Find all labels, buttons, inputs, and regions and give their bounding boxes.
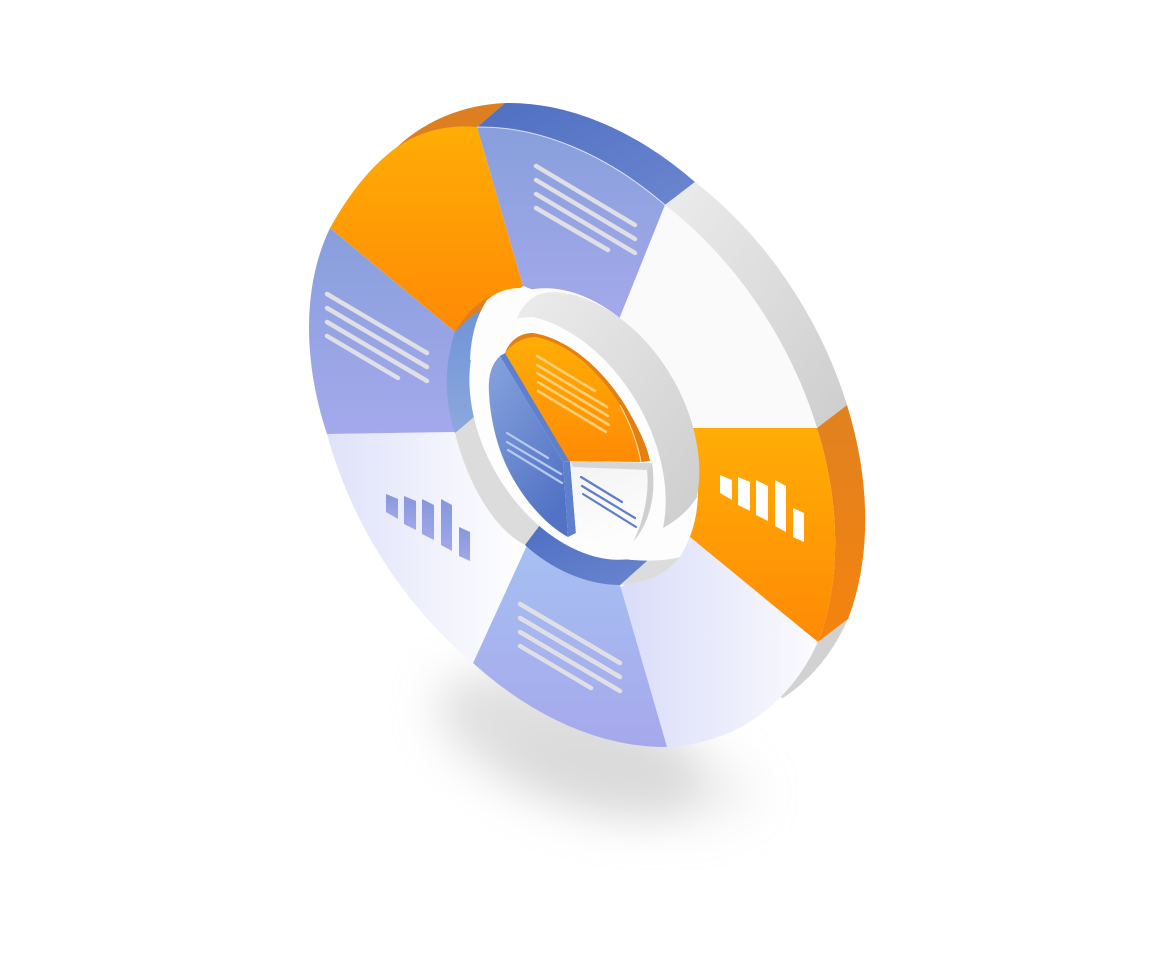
central hub — [423, 248, 741, 600]
hub slope: orange sliver — [455, 296, 495, 332]
hub slope: blue left — [447, 308, 487, 433]
text lines: blue left segment — [327, 294, 427, 381]
segment: blue left — [309, 228, 455, 434]
hub white ring — [423, 248, 741, 600]
pie wedge: blue — [489, 353, 576, 537]
segment: orange right — [688, 428, 835, 642]
disc face segments — [309, 126, 835, 747]
text lines: blue wedge — [507, 433, 562, 483]
bar icon: lavender segment — [386, 494, 470, 561]
segment: orange top — [330, 126, 523, 332]
text lines: blue top segment — [536, 166, 635, 253]
text lines: white wedge — [581, 477, 636, 527]
pie wedge: white — [570, 461, 654, 543]
text lines: orange wedge — [537, 356, 609, 432]
segment: blue bottom — [473, 545, 667, 747]
segment: blue top — [477, 127, 665, 322]
bar icon: orange segment — [720, 475, 804, 542]
hub slope: blue bottom — [525, 525, 660, 585]
segment: lavender lower right — [620, 537, 818, 747]
disc side wall — [397, 103, 865, 698]
ground shadow — [418, 641, 765, 849]
segment: lavender left — [327, 432, 527, 663]
hub slope: grey left — [455, 412, 550, 545]
pie wedge: orange — [505, 333, 650, 462]
segment: white — [618, 205, 817, 430]
hub slope: grey bottom right — [620, 550, 684, 585]
hub grey inner wall — [517, 292, 699, 528]
text lines: blue bottom segment — [520, 604, 620, 691]
